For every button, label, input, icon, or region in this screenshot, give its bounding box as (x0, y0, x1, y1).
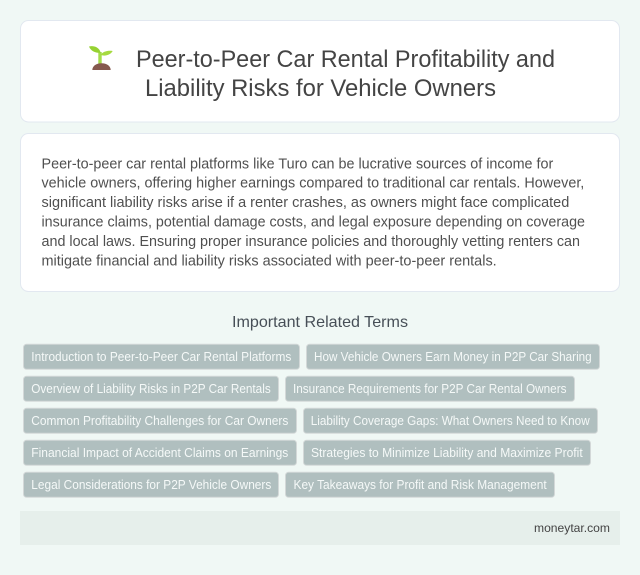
text block: description: Peer-to-peer car rental platforms like Turo can be lucrative sources of income for (42, 156, 554, 172)
text block: description: insurance claims, potential damage costs, and legal exposure depending on coverage (42, 215, 585, 231)
text block: description: mitigate financial and liability risks associated with peer-to-peer rentals. (42, 254, 497, 270)
tag (24, 440, 296, 465)
tag (286, 376, 574, 401)
title: Peer-to-Peer Car Rental Profitability and (136, 46, 555, 73)
text block: description: significant liability risks arise if a renter crashes, as owners might face complicated (42, 195, 569, 211)
text block: description (42, 156, 585, 270)
footer (20, 511, 620, 545)
tag: Legal Considerations for P2P Vehicle Owners (31, 478, 271, 492)
tag: Financial Impact of Accident Claims on Earnings (31, 446, 288, 460)
title (136, 46, 555, 102)
tag (304, 440, 590, 465)
tag (306, 344, 600, 369)
tag: Liability Coverage Gaps: What Owners Need to Know (311, 414, 591, 428)
tag: How Vehicle Owners Earn Money in P2P Car Sharing (314, 350, 592, 364)
text block: description: vehicle owners, offering higher earnings compared to traditional car rentals. However, (42, 176, 584, 192)
tag: Overview of Liability Risks in P2P Car Rentals (31, 382, 271, 396)
tag: Introduction to Peer-to-Peer Car Rental Platforms (31, 350, 291, 364)
text block: description: and local laws. Ensuring proper insurance policies and thoroughly vetting renters can (42, 234, 580, 250)
panel: title card (20, 20, 620, 122)
title: Liability Risks for Vehicle Owners (145, 75, 496, 102)
tag: Insurance Requirements for P2P Car Rental Owners (293, 382, 566, 396)
icon: seedling (89, 46, 113, 70)
tag (24, 472, 278, 497)
tag: Common Profitability Challenges for Car Owners (31, 414, 288, 428)
tag (24, 408, 296, 433)
tag list (24, 344, 600, 497)
tag: Strategies to Minimize Liability and Maximize Profit (311, 446, 583, 460)
tag (24, 344, 300, 369)
tag (24, 376, 278, 401)
footer: moneytar.com (534, 521, 610, 535)
panel: description (20, 134, 620, 292)
tag: Key Takeaways for Profit and Risk Management (294, 478, 547, 492)
heading: related terms: Important Related Terms (232, 314, 408, 331)
tag (304, 408, 598, 433)
tag (286, 472, 554, 497)
